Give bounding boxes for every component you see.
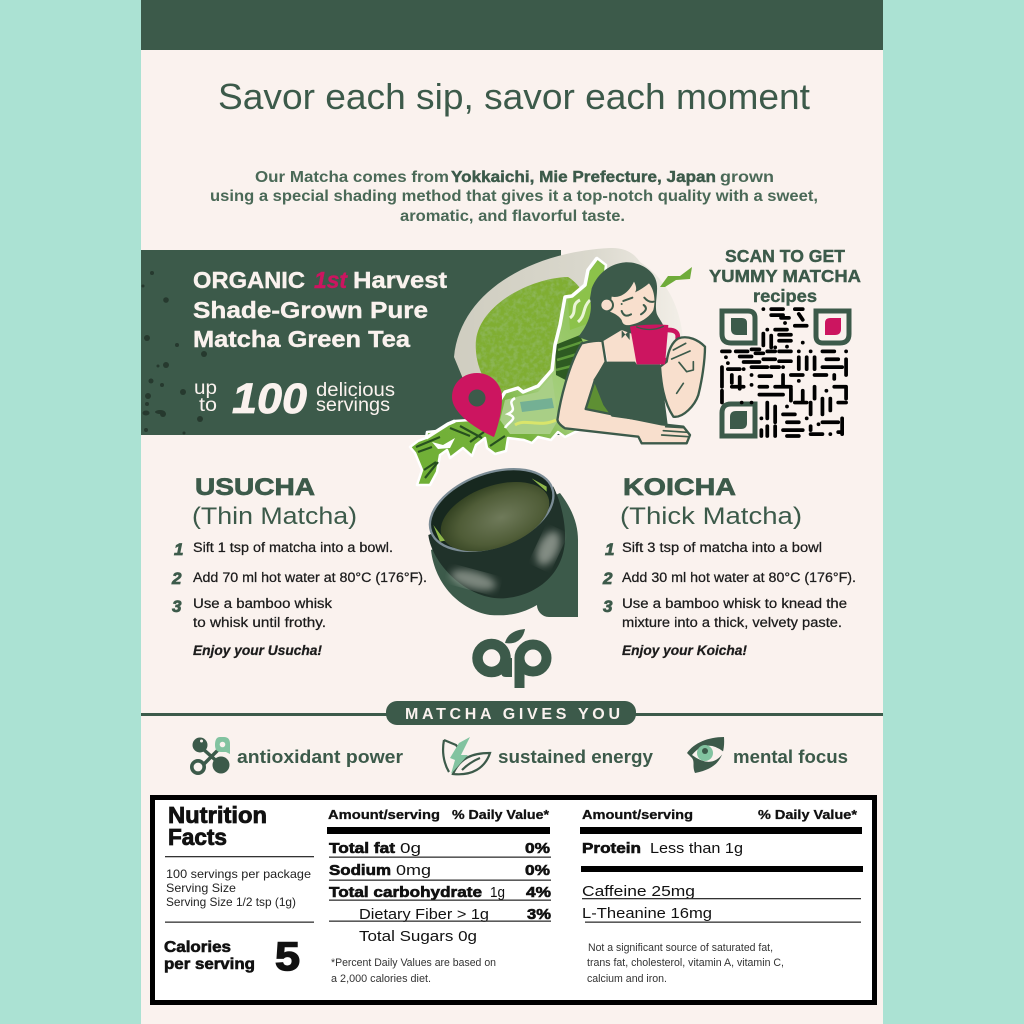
top band xyxy=(141,0,883,50)
Koicha steps: 1 xyxy=(605,540,614,559)
intro paragraph: using a special shading method that gives it a top-notch quality with a sweet, xyxy=(210,188,818,205)
middle nutrition table: 1g xyxy=(490,884,505,901)
neck and chest xyxy=(603,330,637,363)
Koicha steps: Sift 3 tsp of matcha into a bowl xyxy=(622,540,822,555)
nutrition title: Nutrition xyxy=(168,802,267,828)
benefit: sustained energy: sustained energy xyxy=(498,747,653,767)
raised forearm and hand xyxy=(660,337,705,417)
banner panel xyxy=(141,250,561,435)
Usucha steps: Sift 1 tsp of matcha into a bowl. xyxy=(193,540,393,555)
map detached fragment xyxy=(660,267,692,287)
servings claim xyxy=(194,375,395,423)
Koicha steps: Add 30 ml hot water at 80°C (176°F). xyxy=(622,570,856,585)
QR finder top-right xyxy=(816,311,849,343)
Usucha steps xyxy=(171,540,427,658)
banner headline: ORGANIC xyxy=(193,267,305,293)
middle nutrition table: 0% xyxy=(525,862,550,879)
mug handle xyxy=(667,330,678,362)
serving info xyxy=(166,867,311,909)
section badge xyxy=(386,701,636,725)
right nutrition table: L-Theanine 16mg xyxy=(582,905,712,922)
Koicha subtitle: (Thick Matcha) xyxy=(620,503,802,530)
right nutrition table xyxy=(580,807,863,985)
right nutrition table: Caffeine 25mg xyxy=(582,883,695,900)
Usucha steps: Use a bamboo whisk xyxy=(193,596,332,611)
green a-shaped backdrop behind cup xyxy=(431,493,578,617)
section badge: MATCHA GIVES YOU xyxy=(405,706,620,723)
mug xyxy=(630,324,668,364)
Japan map cutout xyxy=(410,258,692,485)
right nutrition table: Less than 1g xyxy=(650,840,743,857)
QR heading: YUMMY MATCHA xyxy=(709,266,861,286)
middle nutrition table: Amount/serving xyxy=(328,807,440,822)
right nutrition table: trans fat, cholesterol, vitamin A, vitamin C, xyxy=(587,957,784,969)
map pale river valley xyxy=(500,376,558,434)
middle nutrition table: Dietary Fiber > 1g xyxy=(359,906,489,923)
Koicha steps xyxy=(602,540,856,658)
benefit: mental focus xyxy=(687,737,848,773)
middle nutrition table: Total carbohydrate xyxy=(329,884,482,901)
middle nutrition table xyxy=(327,807,551,985)
ear xyxy=(600,299,613,311)
servings claim: 100 xyxy=(232,375,307,423)
location pin xyxy=(452,373,502,437)
collar bow xyxy=(622,330,630,340)
servings claim: delicious xyxy=(316,380,395,401)
middle nutrition table: Total fat xyxy=(329,840,395,857)
icon: molecule xyxy=(192,737,230,774)
intro paragraph: Our Matcha comes from xyxy=(255,169,449,186)
servings claim: up xyxy=(194,378,217,399)
hair xyxy=(578,262,665,343)
benefit: antioxidant power xyxy=(192,737,403,774)
middle nutrition table: *Percent Daily Values are based on xyxy=(331,957,496,969)
Koicha steps: Enjoy your Koicha! xyxy=(622,643,747,658)
intro paragraph: Yokkaichi, Mie Prefecture, Japan xyxy=(451,169,716,186)
matcha cup photo xyxy=(419,454,565,598)
calories: Calories xyxy=(164,939,231,956)
calories: per serving xyxy=(164,956,255,973)
QR code xyxy=(722,309,849,436)
banner ink specks xyxy=(142,271,207,434)
servings claim: to xyxy=(199,395,217,416)
banner headline: Shade-Grown Pure xyxy=(193,297,428,323)
gap behind arm xyxy=(586,383,613,418)
nutrition facts panel xyxy=(152,798,874,1002)
left arm xyxy=(557,341,690,443)
intro paragraph: grown xyxy=(720,169,774,186)
serving info: 100 servings per package xyxy=(166,867,311,881)
benefit: mental focus: mental focus xyxy=(733,747,848,767)
QR finder bottom-left xyxy=(722,404,755,436)
Usucha steps: Enjoy your Usucha! xyxy=(193,643,323,658)
serving info: Serving Size 1/2 tsp (1g) xyxy=(166,895,296,909)
Koicha steps: mixture into a thick, velvety paste. xyxy=(622,615,842,630)
ap logo xyxy=(478,629,546,688)
banner headline: 1st xyxy=(314,267,348,293)
Koicha steps: Use a bamboo whisk to knead the xyxy=(622,596,847,611)
QR heading: SCAN TO GET xyxy=(725,246,845,266)
map white coast edge xyxy=(426,258,597,438)
intro paragraph: aromatic, and flavorful taste. xyxy=(400,208,625,225)
middle nutrition table: 0% xyxy=(525,840,550,857)
Usucha steps: 1 xyxy=(174,540,183,559)
Usucha steps: 3 xyxy=(172,597,182,616)
QR finder top-left xyxy=(722,311,755,343)
servings claim: servings xyxy=(316,395,390,416)
middle nutrition table: a 2,000 calories diet. xyxy=(331,973,431,985)
face xyxy=(610,282,654,325)
middle nutrition table: 4% xyxy=(526,884,551,901)
map white inlet xyxy=(432,438,455,449)
title: Savor each sip, savor each moment xyxy=(218,76,810,117)
right nutrition table: % Daily Value* xyxy=(758,807,858,822)
nutrition title xyxy=(168,802,267,850)
Usucha heading: USUCHA xyxy=(195,474,315,501)
middle nutrition table: 0mg xyxy=(396,862,431,879)
right nutrition table: Protein xyxy=(582,840,641,857)
Koicha steps: 3 xyxy=(603,597,613,616)
benefit: sustained energy xyxy=(443,737,653,774)
Usucha subtitle: (Thin Matcha) xyxy=(192,503,357,530)
middle nutrition table: 3% xyxy=(527,906,551,923)
icon: leaf with bolt xyxy=(443,737,490,774)
right nutrition table: Not a significant source of saturated fat, xyxy=(588,942,773,954)
middle nutrition table: 0g xyxy=(400,840,421,857)
woman drinking matcha illustration xyxy=(557,262,705,443)
map dark field rows xyxy=(416,426,505,478)
benefit: antioxidant power: antioxidant power xyxy=(237,747,403,767)
section divider xyxy=(141,713,883,716)
matcha powder bowl xyxy=(454,248,683,420)
Usucha recipe xyxy=(171,474,427,658)
Usucha steps: 2 xyxy=(171,569,182,588)
right nutrition table: calcium and iron. xyxy=(587,973,667,985)
Koicha recipe xyxy=(602,474,856,658)
banner headline xyxy=(193,267,447,352)
serving info: Serving Size xyxy=(166,881,236,895)
dress xyxy=(593,362,668,424)
map upper strip xyxy=(568,262,603,330)
central panel xyxy=(141,0,883,1024)
Koicha heading: KOICHA xyxy=(623,474,736,501)
nutrition title: Facts xyxy=(168,824,227,850)
QR heading xyxy=(709,246,861,306)
QR data modules xyxy=(722,309,846,436)
face features xyxy=(622,298,654,316)
middle nutrition table: Sodium xyxy=(329,862,391,879)
banner headline: Harvest xyxy=(353,267,447,293)
banner headline: Matcha Green Tea xyxy=(193,326,410,352)
calories xyxy=(164,935,300,979)
calories: 5 xyxy=(275,935,300,979)
Usucha steps: Add 70 ml hot water at 80°C (176°F). xyxy=(193,570,427,585)
QR heading: recipes xyxy=(753,286,817,306)
Usucha steps: to whisk until frothy. xyxy=(193,615,326,630)
intro paragraph xyxy=(210,169,818,225)
middle nutrition table: % Daily Value* xyxy=(452,807,550,822)
icon: eye leaf xyxy=(687,737,724,773)
right nutrition table: Amount/serving xyxy=(582,807,693,822)
Koicha steps: 2 xyxy=(602,569,613,588)
middle nutrition table: Total Sugars 0g xyxy=(359,928,477,945)
